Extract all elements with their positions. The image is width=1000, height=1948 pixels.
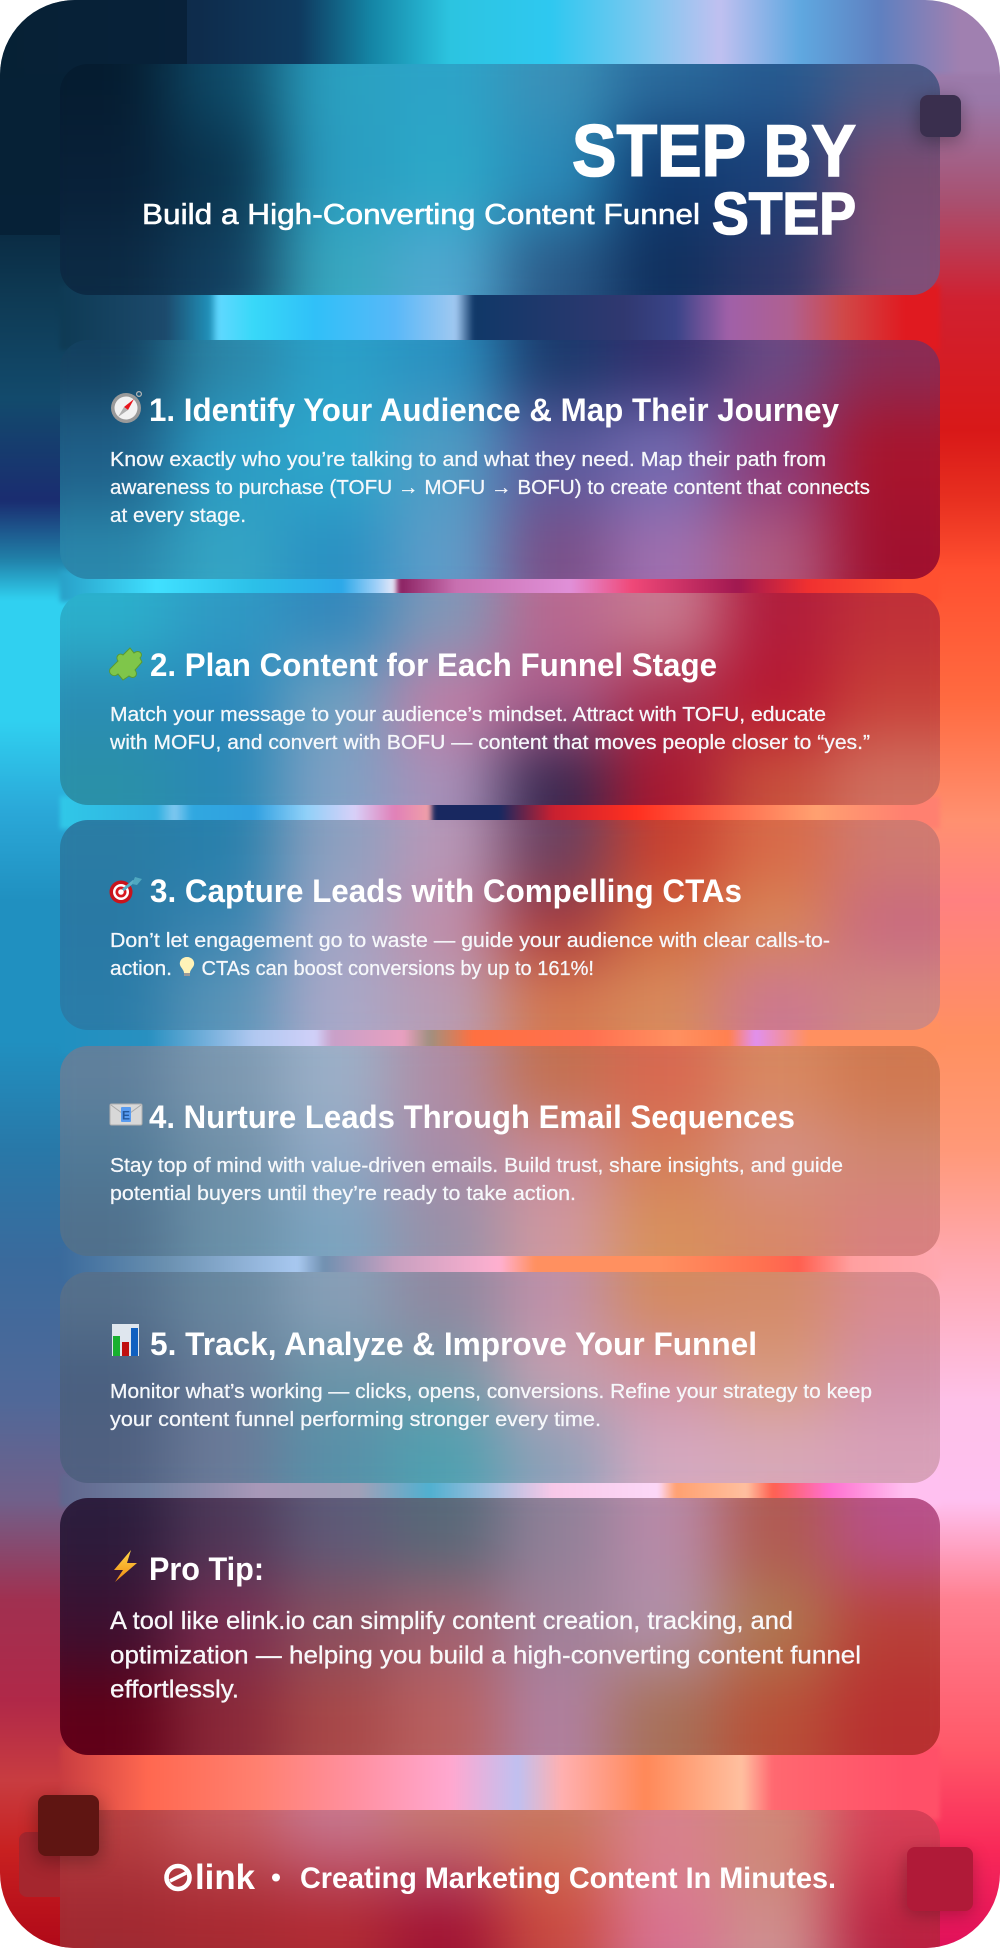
panel: step 3	[60, 820, 940, 1030]
body: step 1: at every stage.	[110, 505, 246, 527]
logo: elink: link	[195, 1858, 256, 1897]
body: step 2: Match your message to your audience’s mindset. Attract with TOFU, educate	[110, 704, 826, 726]
icon: compass	[111, 392, 141, 423]
body: step 1: Know exactly who you’re talking to and what they need. Map their path from	[110, 449, 826, 471]
tagline: Creating Marketing Content In Minutes.	[300, 1862, 836, 1895]
heading: step by step	[573, 124, 856, 236]
icon: puzzle piece	[110, 648, 142, 680]
body: step 3: Don’t let engagement go to waste — guide your audience with clear calls-to-	[110, 930, 830, 952]
panel: step 2	[60, 593, 940, 805]
heading: step 5: 5. Track, Analyze & Improve Your Funnel	[150, 1326, 757, 1362]
body: pro tip: optimization — helping you build a high-converting content funnel	[110, 1642, 861, 1670]
icon: email envelope	[110, 1104, 142, 1125]
heading: step 4: 4. Nurture Leads Through Email Sequences	[149, 1099, 795, 1135]
body: step 1: awareness to purchase (TOFU → MOFU → BOFU) to create content that connects	[110, 477, 870, 499]
heading: step by step: STEP BY	[572, 111, 856, 192]
body: pro tip: effortlessly.	[110, 1676, 239, 1704]
decorative dark square top left	[0, 0, 187, 235]
logo: elink	[164, 1864, 255, 1892]
subtitle: Build a High-Converting Content Funnel	[142, 199, 700, 231]
body: pro tip	[110, 1607, 861, 1704]
body: step 3: CTAs can boost conversions by up to 161%!	[202, 958, 594, 980]
body: step 2	[109, 704, 870, 754]
body: step 4	[110, 1155, 843, 1205]
decorative square bottom right	[905, 1847, 973, 1915]
body: step 3: action.	[110, 958, 172, 980]
body: step 1	[110, 449, 870, 527]
body: step 5: your content funnel performing stronger every time.	[110, 1409, 601, 1431]
heading: pro tip: Pro Tip:	[149, 1551, 264, 1587]
icon: bullseye with dart	[110, 877, 142, 904]
heading: step 2: 2. Plan Content for Each Funnel Stage	[150, 647, 717, 683]
decorative square bottom left, back	[19, 1832, 60, 1897]
panel: title	[60, 64, 940, 295]
icon: bar chart	[112, 1324, 139, 1356]
panel: footer	[60, 1810, 940, 1948]
heading: step 1: 1. Identify Your Audience & Map Their Journey	[149, 392, 839, 428]
decorative square top right	[918, 95, 962, 142]
body: step 4: potential buyers until they’re ready to take action.	[110, 1183, 576, 1205]
body: step 3	[110, 930, 830, 980]
body: step 5	[110, 1381, 872, 1431]
panel: step 4	[60, 1046, 940, 1256]
decorative square bottom left, front	[36, 1795, 102, 1862]
panel: pro tip	[60, 1498, 940, 1755]
heading: step 3: 3. Capture Leads with Compelling CTAs	[150, 873, 742, 909]
bullet separator	[272, 1874, 280, 1882]
body: step 5: Monitor what’s working — clicks, opens, conversions. Refine your strategy to keep	[110, 1381, 872, 1403]
heading: step by step: STEP	[712, 181, 856, 247]
icon: lightning bolt	[114, 1550, 137, 1582]
icon: email envelope: E	[122, 1108, 130, 1122]
body: step 4: Stay top of mind with value-driven emails. Build trust, share insights, and guide	[110, 1155, 843, 1177]
body: pro tip: A tool like elink.io can simplify content creation, tracking, and	[110, 1607, 793, 1635]
panel: step 5	[60, 1272, 940, 1483]
panel: step 1	[60, 340, 940, 579]
body: step 2: with MOFU, and convert with BOFU — content that moves people closer to “yes.”	[109, 732, 870, 754]
